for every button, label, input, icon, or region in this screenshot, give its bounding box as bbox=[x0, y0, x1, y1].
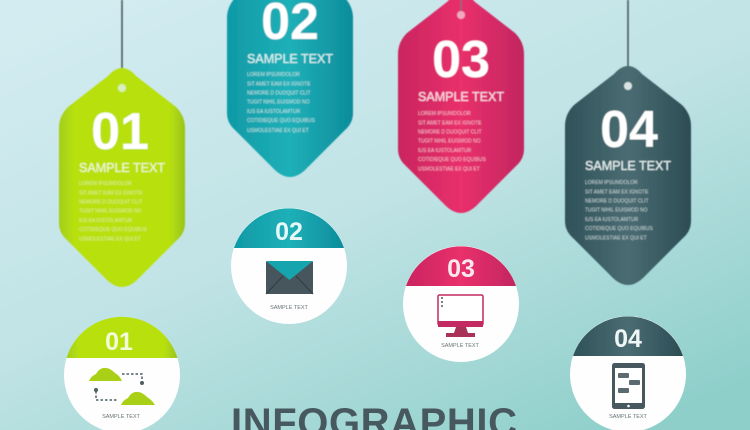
body text 03: TUGIT NIHIL EUISMOD NO bbox=[418, 138, 481, 144]
icon: smartphone with chat bbox=[612, 363, 645, 409]
string 04 bbox=[627, 0, 629, 85]
circle card 03 bbox=[403, 246, 519, 362]
string 03 bbox=[460, 0, 462, 13]
number 01 small: 01 bbox=[105, 328, 133, 356]
body text 04: USMOLESTIAE EX QUI ET bbox=[585, 236, 647, 242]
circle card 04 bbox=[570, 316, 686, 430]
number 03 small: 03 bbox=[447, 255, 475, 283]
tag shape 04 bbox=[565, 66, 691, 285]
circle card 01 bbox=[64, 317, 180, 430]
body text 02: LOREM IPSUMDOLOR bbox=[247, 72, 300, 78]
body text 02: NEMORE D DUOQUIT CLIT bbox=[247, 90, 311, 96]
body text 02: SIT AMET EAM EX IGNOTE bbox=[247, 82, 311, 88]
caption 02: SAMPLE TEXT bbox=[270, 305, 309, 311]
number 03: 03 bbox=[432, 31, 490, 89]
body text 03: COTIDIEQUE QUO EQUIBUS bbox=[418, 157, 486, 163]
body text 04: COTIDIEQUE QUO EQUIBUS bbox=[585, 226, 653, 232]
number 04 small: 04 bbox=[614, 325, 642, 353]
body text 03: NEMORE D DUOQUIT CLIT bbox=[418, 130, 482, 136]
body text 01: TUGIT NIHIL EUISMOD NO bbox=[79, 208, 142, 214]
circle card 02 bbox=[231, 208, 347, 324]
white disc 01 bbox=[64, 317, 180, 430]
body text 04: IUS EA IUSTOLAMTUR bbox=[585, 217, 639, 223]
hanging tag 04 bbox=[565, 0, 691, 285]
body text 01: USMOLESTIAE EX QUI ET bbox=[79, 236, 141, 242]
hanging tag 03 bbox=[398, 0, 524, 213]
body text 03: USMOLESTIAE EX QUI ET bbox=[418, 166, 480, 172]
body text 02: TUGIT NIHIL EUISMOD NO bbox=[247, 100, 310, 106]
tag shape 02 bbox=[227, 0, 353, 177]
icon: desktop monitor bbox=[438, 295, 483, 337]
body text 03 bbox=[418, 111, 486, 172]
body text 04: LOREM IPSUMDOLOR bbox=[585, 180, 638, 186]
heading 01: SAMPLE TEXT bbox=[79, 161, 165, 175]
body text 01: SIT AMET EAM EX IGNOTE bbox=[79, 190, 143, 196]
coloured cap 01 bbox=[66, 317, 178, 358]
icon: connected clouds bbox=[89, 368, 155, 405]
coloured cap 02 bbox=[234, 208, 344, 248]
body text 01: IUS EA IUSTOLAMTUR bbox=[79, 218, 133, 224]
tag shape 01 bbox=[59, 68, 185, 287]
body text 03: IUS EA IUSTOLAMTUR bbox=[418, 148, 472, 154]
caption 04: SAMPLE TEXT bbox=[609, 414, 648, 420]
number 01: 01 bbox=[91, 103, 149, 161]
number 02 small: 02 bbox=[275, 218, 303, 246]
coloured cap 03 bbox=[406, 246, 516, 286]
number 04: 04 bbox=[600, 101, 658, 159]
body text 01: NEMORE D DUOQUIT CLIT bbox=[79, 200, 143, 206]
body text 02 bbox=[247, 72, 315, 134]
eyelet 03 bbox=[457, 11, 465, 19]
body text 01 bbox=[79, 181, 147, 242]
eyelet 01 bbox=[118, 84, 126, 92]
white disc 04 bbox=[570, 316, 686, 430]
icon: envelope bbox=[266, 261, 313, 294]
tag shape 03 bbox=[398, 0, 524, 213]
hanging tag 02 bbox=[227, 0, 353, 177]
caption 01: SAMPLE TEXT bbox=[102, 414, 141, 420]
body text 03: SIT AMET EAM EX IGNOTE bbox=[418, 120, 482, 126]
eyelet 04 bbox=[624, 82, 632, 90]
body text 04: SIT AMET EAM EX IGNOTE bbox=[585, 190, 649, 196]
white disc 03 bbox=[403, 246, 519, 362]
heading 02: SAMPLE TEXT bbox=[247, 52, 333, 66]
body text 04: TUGIT NIHIL EUISMOD NO bbox=[585, 208, 648, 214]
caption 03: SAMPLE TEXT bbox=[441, 343, 480, 349]
body text 02: COTIDIEQUE QUO EQUIBUS bbox=[247, 118, 315, 124]
body text 02: USMOLESTIAE EX QUI ET bbox=[247, 128, 309, 134]
heading 03: SAMPLE TEXT bbox=[418, 90, 504, 104]
hanging tag 01 bbox=[59, 0, 185, 287]
body text 04 bbox=[585, 180, 653, 242]
heading 04: SAMPLE TEXT bbox=[585, 159, 671, 173]
white disc 02 bbox=[231, 208, 347, 324]
body text 01: LOREM IPSUMDOLOR bbox=[79, 181, 132, 187]
body text 02: IUS EA IUSTOLAMTUR bbox=[247, 109, 301, 115]
string 01 bbox=[121, 0, 123, 87]
body text 01: COTIDIEQUE QUO EQUIBUS bbox=[79, 227, 147, 233]
body text 04: NEMORE D DUOQUIT CLIT bbox=[585, 198, 649, 204]
coloured cap 04 bbox=[573, 316, 683, 356]
body text 03: LOREM IPSUMDOLOR bbox=[418, 111, 471, 117]
